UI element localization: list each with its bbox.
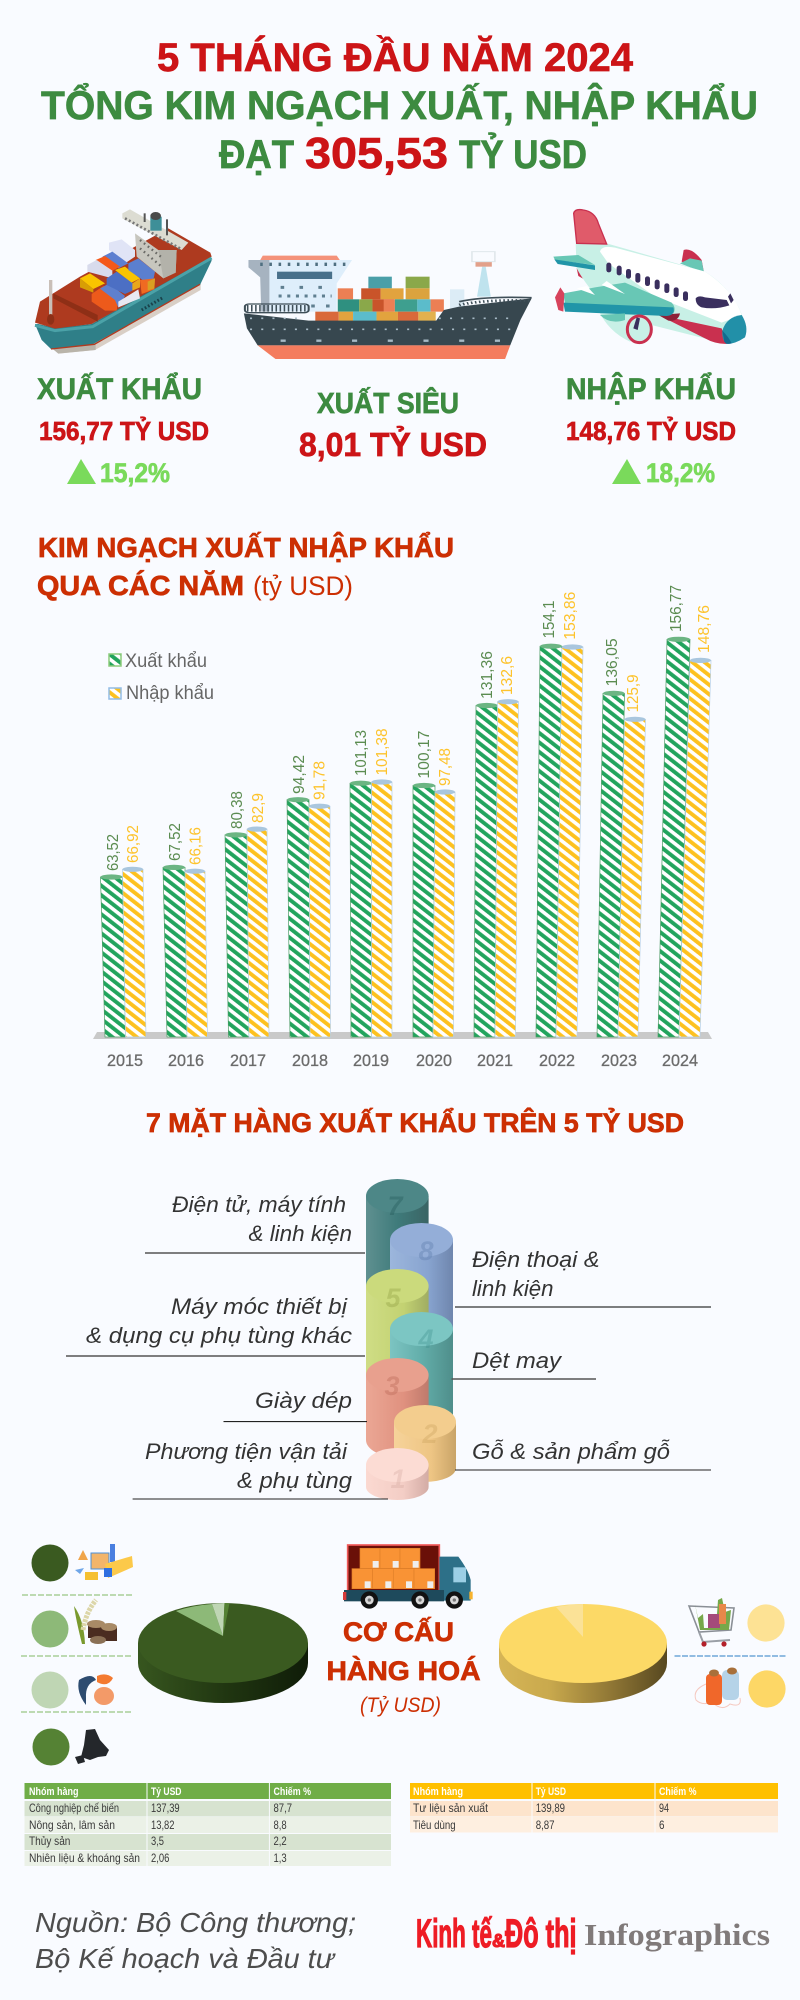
stat: xuất siêu: XUẤT SIÊU xyxy=(317,386,459,420)
table: export groups: Nhiên liệu & khoáng sản xyxy=(29,1851,140,1865)
icon: cargo ship side view xyxy=(244,252,532,359)
cylinder 1 xyxy=(366,1448,429,1500)
icon: rice and logs xyxy=(74,1600,117,1644)
chart heading: (tỷ USD) xyxy=(253,571,353,601)
icon: coal xyxy=(75,1729,109,1764)
year axis labels: 2021 xyxy=(477,1051,513,1070)
title: ĐẠT xyxy=(219,133,294,177)
title: 305,53 xyxy=(305,129,448,178)
table: import groups: 94 xyxy=(659,1801,669,1815)
logo: Kinh tế & Đô thị Infographics: Kinh tế xyxy=(416,1912,492,1956)
table: import groups: 139,89 xyxy=(536,1801,565,1815)
icon: shopping cart xyxy=(689,1598,734,1647)
table: import groups xyxy=(410,1783,778,1833)
bars 2015 xyxy=(100,867,146,1037)
bar value labels xyxy=(105,585,713,871)
label: điện thoại: linh kiện xyxy=(472,1276,554,1301)
pie chart: export structure xyxy=(138,1603,308,1703)
table: import groups: Chiếm % xyxy=(659,1786,697,1798)
bar value labels: 125,9 xyxy=(625,674,642,712)
year axis labels: 2023 xyxy=(601,1051,637,1070)
cylinder stack graphic xyxy=(366,1179,456,1500)
cylinder 3: 3 xyxy=(384,1371,400,1401)
heading: 7 mặt hàng: 7 MẶT HÀNG XUẤT KHẨU TRÊN 5 TỶ USD xyxy=(146,1106,684,1138)
bars 2018 xyxy=(287,797,330,1037)
heading: cơ cấu hàng hoá xyxy=(326,1616,480,1717)
cylinder 2 xyxy=(394,1405,456,1482)
table: export groups: 2,2 xyxy=(274,1834,287,1848)
title: TỔNG KIM NGẠCH XUẤT, NHẬP KHẨU xyxy=(41,81,758,128)
bar value labels: 63,52 xyxy=(105,834,122,871)
table: import groups: Tư liệu sản xuất xyxy=(413,1801,489,1815)
year axis labels: 2018 xyxy=(292,1051,328,1070)
cylinder 2: 2 xyxy=(421,1419,438,1449)
table: import groups: Tiêu dùng xyxy=(413,1818,456,1832)
source note xyxy=(35,1907,356,1974)
table: export groups: Thủy sản xyxy=(29,1834,70,1848)
icon: fish and shrimp xyxy=(78,1674,114,1705)
table: import groups: 8,87 xyxy=(536,1818,555,1832)
bars 2016 xyxy=(163,865,208,1037)
heading: cơ cấu hàng hoá: (Tỷ USD) xyxy=(360,1694,441,1717)
bars 2023 xyxy=(597,691,646,1037)
bar value labels: 67,52 xyxy=(167,823,184,861)
year axis labels xyxy=(107,1051,698,1070)
table: export groups: 3,5 xyxy=(151,1834,164,1848)
cylinder 1: 1 xyxy=(390,1464,406,1494)
bar value labels: 132,6 xyxy=(499,656,516,695)
bar value labels: 91,78 xyxy=(312,761,328,800)
stat: xuất khẩu xyxy=(37,372,209,488)
cylinder 7: 7 xyxy=(387,1191,404,1221)
heading: cơ cấu hàng hoá: HÀNG HOÁ xyxy=(326,1655,480,1686)
title xyxy=(41,34,758,178)
table: export groups: Nhóm hàng xyxy=(29,1786,78,1798)
title: TỶ USD xyxy=(459,131,587,177)
bars 2019 xyxy=(350,779,392,1037)
label: điện thoại xyxy=(455,1247,711,1307)
label: máy móc: & dụng cụ phụ tùng khác xyxy=(86,1323,352,1348)
chart legend: Nhập khẩu xyxy=(126,683,214,704)
table: export groups: 1,3 xyxy=(274,1851,287,1865)
bar value labels: 66,92 xyxy=(125,825,142,863)
chart legend: Xuất khẩu xyxy=(125,651,207,672)
icon: thread spools xyxy=(695,1668,740,1708)
stat: nhập khẩu: NHẬP KHẨU xyxy=(566,372,736,406)
bars 2020 xyxy=(413,783,455,1037)
stat: xuất khẩu: XUẤT KHẨU xyxy=(37,372,202,406)
source note: Bộ Kế hoạch và Đầu tư xyxy=(35,1943,336,1974)
bar value labels: 97,48 xyxy=(437,748,454,786)
label: gỗ: Gỗ & sản phẩm gỗ xyxy=(472,1439,670,1464)
containers xyxy=(315,277,444,322)
cylinder 4 xyxy=(390,1312,453,1432)
icon: container ship isometric xyxy=(35,209,212,354)
table: import groups: 6 xyxy=(659,1818,665,1832)
label: dệt may: Dệt may xyxy=(472,1348,563,1373)
bar value labels: 100,17 xyxy=(416,731,433,779)
logo: Kinh tế & Đô thị Infographics xyxy=(416,1912,770,1956)
logo: Kinh tế & Đô thị Infographics: Đô thị xyxy=(505,1912,576,1956)
bar value labels: 156,77 xyxy=(668,585,685,632)
stat: nhập khẩu: 148,76 TỶ USD xyxy=(566,416,736,446)
bars 2017 xyxy=(225,826,269,1037)
cylinder 5: 5 xyxy=(385,1283,401,1313)
bars 2022 xyxy=(536,644,583,1037)
cylinder 8 xyxy=(390,1223,453,1357)
chart legend xyxy=(109,651,214,704)
bar value labels: 101,38 xyxy=(374,728,391,776)
label: phương tiện: Phương tiện vận tải xyxy=(145,1439,348,1464)
label: điện tử: & linh kiện xyxy=(248,1221,352,1246)
year axis labels: 2020 xyxy=(416,1051,452,1070)
stat: xuất khẩu: 156,77 TỶ USD xyxy=(39,416,209,446)
table: export groups: 137,39 xyxy=(151,1801,180,1815)
cylinder 3 xyxy=(366,1358,429,1457)
title: 5 THÁNG ĐẦU NĂM 2024 xyxy=(157,34,634,80)
table: export groups: 87,7 xyxy=(274,1801,292,1815)
bar value labels: 154,1 xyxy=(541,600,558,638)
table: export groups: Tỷ USD xyxy=(151,1786,182,1798)
table: import groups: Tỷ USD xyxy=(536,1786,566,1798)
table: export groups: Chiếm % xyxy=(274,1786,311,1798)
legend: import groups with icons xyxy=(674,1598,786,1708)
table: export groups xyxy=(24,1783,391,1866)
bar value labels: 82,9 xyxy=(250,793,267,823)
bar value labels: 136,05 xyxy=(604,638,621,686)
year axis labels: 2024 xyxy=(662,1051,698,1070)
label: điện tử xyxy=(145,1192,365,1253)
table: export groups: 13,82 xyxy=(151,1818,175,1832)
stat: xuất khẩu: 15,2% xyxy=(100,458,170,488)
year axis labels: 2015 xyxy=(107,1051,143,1070)
cylinder 7 xyxy=(366,1179,429,1317)
cylinder 4: 4 xyxy=(417,1324,434,1354)
chart heading: KIM NGẠCH XUẤT NHẬP KHẨU xyxy=(38,532,454,563)
chart heading xyxy=(37,532,454,601)
bars 2021 xyxy=(474,699,518,1037)
year axis labels: 2016 xyxy=(168,1051,204,1070)
year axis labels: 2019 xyxy=(353,1051,389,1070)
logo: Kinh tế & Đô thị Infographics: & xyxy=(492,1931,505,1951)
bar value labels: 101,13 xyxy=(353,730,370,776)
bars 2024 xyxy=(658,637,711,1037)
bar value labels: 66,16 xyxy=(188,827,204,865)
cylinder 5 xyxy=(366,1269,429,1402)
label: máy móc: Máy móc thiết bị xyxy=(171,1294,348,1319)
stat: nhập khẩu xyxy=(566,372,736,488)
table: export groups: Nông sản, lâm sản xyxy=(29,1818,115,1832)
icon: airplane xyxy=(553,210,746,344)
source note: Nguồn: Bộ Công thương; xyxy=(35,1907,356,1938)
pie chart: import structure xyxy=(499,1604,667,1703)
label: điện tử: Điện tử, máy tính xyxy=(172,1192,346,1217)
bar value labels: 148,76 xyxy=(696,605,713,653)
bar value labels: 153,86 xyxy=(562,592,579,640)
logo: Kinh tế & Đô thị Infographics: Infographics xyxy=(584,1917,770,1952)
legend: export groups with icons xyxy=(21,1544,133,1766)
chart heading: QUA CÁC NĂM xyxy=(37,570,244,601)
bar value labels: 80,38 xyxy=(229,791,246,829)
icon: delivery truck xyxy=(343,1545,473,1609)
table: export groups: 2,06 xyxy=(151,1851,170,1865)
bar value labels: 131,36 xyxy=(479,651,496,699)
stat: xuất siêu xyxy=(299,386,487,463)
heading: cơ cấu hàng hoá: CƠ CẤU xyxy=(343,1616,454,1647)
bar value labels: 94,42 xyxy=(291,755,308,794)
bar chart: export and import 2015-2024 xyxy=(93,585,713,1070)
table: export groups: 8,8 xyxy=(274,1818,287,1832)
label: máy móc xyxy=(66,1294,365,1356)
stat: nhập khẩu: 18,2% xyxy=(646,458,715,488)
cylinder 8: 8 xyxy=(418,1236,434,1266)
label: phương tiện xyxy=(133,1439,388,1499)
label: phương tiện: & phụ tùng xyxy=(237,1468,353,1493)
table: export groups: Công nghiệp chế biến xyxy=(29,1801,119,1815)
label: giày dép: Giày dép xyxy=(255,1388,352,1413)
label: điện thoại: Điện thoại & xyxy=(472,1247,600,1272)
table: import groups: Nhóm hàng xyxy=(413,1786,463,1798)
stat: xuất siêu: 8,01 TỶ USD xyxy=(299,426,487,463)
icon: warehouse and truck xyxy=(75,1544,133,1580)
year axis labels: 2022 xyxy=(539,1051,575,1070)
year axis labels: 2017 xyxy=(230,1051,266,1070)
airplane windows xyxy=(606,263,734,308)
